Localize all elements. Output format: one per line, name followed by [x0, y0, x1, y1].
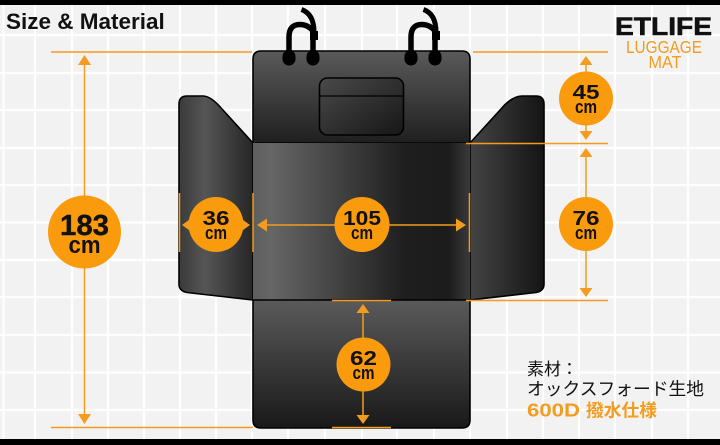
dimension: 45 cm: 45 [572, 81, 600, 104]
pocket [320, 78, 404, 135]
dimension: 36 cm [182, 197, 250, 252]
dimension: 62 cm [336, 304, 390, 424]
logo: ETLIFE Luggage Mat [615, 13, 712, 72]
top black bar [0, 0, 720, 5]
title: Size & Material [6, 9, 165, 34]
dimension: 183 cm: 183 [60, 210, 109, 242]
top panel [253, 51, 470, 143]
dimension: 76 cm [559, 148, 613, 297]
material text block: 600D [527, 400, 580, 420]
dimension: 76 cm: cm [575, 223, 597, 243]
logo: ETLIFE Luggage Mat: LUGGAGE [626, 37, 702, 57]
logo: ETLIFE Luggage Mat: ETLIFE [615, 13, 712, 41]
dimension: 45 cm [559, 56, 613, 140]
dimension: 36 cm: cm [205, 223, 227, 243]
material text block: 素材： [527, 360, 578, 379]
right flap [470, 96, 544, 300]
left strap and buckle [282, 10, 320, 66]
material text block [527, 360, 704, 420]
dimension: 183 cm: cm [68, 232, 100, 259]
bottom black bar [0, 439, 720, 445]
dimension: 105 cm: 105 [343, 207, 381, 230]
material text block: オックスフォード生地 [527, 379, 704, 399]
dimension: 62 cm: cm [352, 363, 374, 383]
dimension: 76 cm: 76 [572, 207, 600, 230]
bottom panel [253, 300, 470, 428]
dimension: 105 cm: cm [351, 223, 373, 243]
dimension: 45 cm: cm [575, 97, 597, 117]
logo: ETLIFE Luggage Mat: MAT [648, 52, 682, 72]
dimension: 183 cm [48, 55, 121, 424]
right strap and buckle [404, 10, 442, 66]
dimension: 105 cm [257, 197, 466, 252]
dimension: 62 cm: 62 [350, 347, 377, 370]
dimension: 36 cm: 36 [202, 207, 230, 230]
material text block: 撥水仕様 [586, 400, 658, 420]
dimension guide lines [51, 52, 608, 428]
left flap [179, 96, 253, 300]
centre panel [253, 143, 470, 300]
luggage mat illustration [179, 51, 544, 428]
